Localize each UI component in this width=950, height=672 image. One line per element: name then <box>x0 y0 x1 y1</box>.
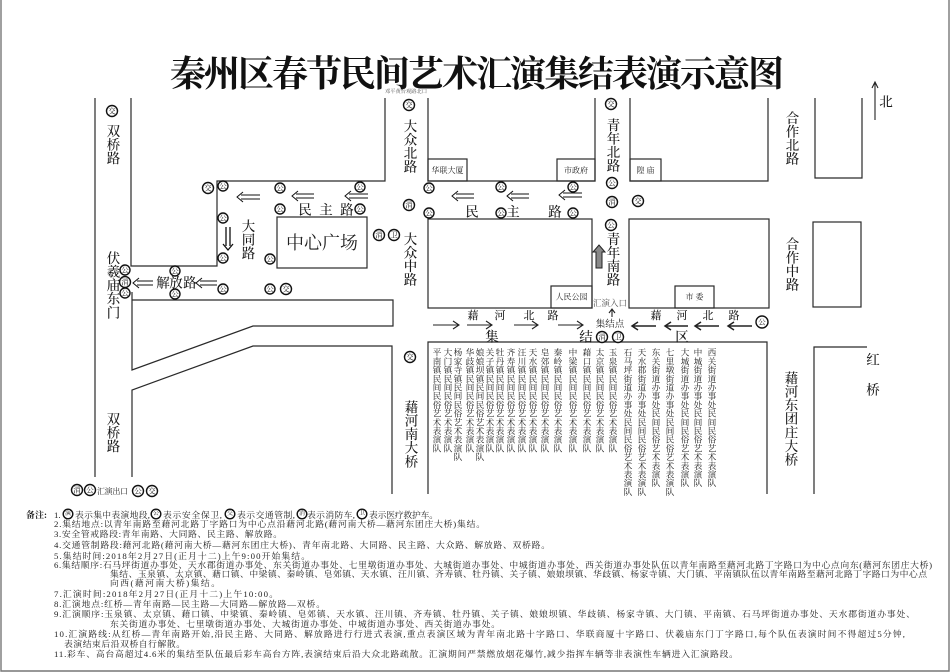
markers: west section: 公 <box>219 254 227 262</box>
panel: performance team columns: 大门镇民间民俗艺术表演队 <box>442 347 453 453</box>
road names: horizontal labels: 路 <box>183 276 197 290</box>
markers: east section: 卫 <box>614 332 622 342</box>
road names: horizontal labels: 主 <box>319 202 333 218</box>
panel: performance team columns: 关子镇民间民俗艺术表演队 <box>484 347 495 453</box>
exit label: 汇演出口: 公 <box>86 486 94 494</box>
note 1: legend: 交 <box>227 509 233 517</box>
road names: vertical labels: 青年南路 <box>604 231 620 287</box>
road names: vertical labels: 大同路 <box>240 218 255 260</box>
road names: horizontal labels: 路 <box>548 308 558 322</box>
markers: central section <box>374 100 578 362</box>
landmark: 中心广场 <box>277 217 367 268</box>
exit label: 汇演出口: 汇演出口 <box>97 486 128 496</box>
double arrow: 大同路 south <box>223 227 233 250</box>
markers: central section: 交 <box>406 352 414 362</box>
markers: west section: 公 <box>356 182 364 192</box>
panel: performance team columns: 石马坪街道办事处民间民俗艺术表演队 <box>622 348 633 497</box>
exit label: 汇演出口: 公 <box>134 486 142 496</box>
road names: horizontal labels: 解 <box>156 276 170 290</box>
road names: vertical labels: 双桥路 <box>104 124 120 165</box>
markers: west section: 公 <box>121 266 129 274</box>
markers: west section: 公 <box>219 182 227 190</box>
notes block <box>26 509 932 659</box>
panel: performance team columns: 天水镇民间民俗艺术表演队 <box>527 348 538 453</box>
markers: west section: 公 <box>171 266 179 276</box>
landmark: 市政府 <box>557 159 595 181</box>
landmark: 中心广场: 中心广场 <box>286 233 358 253</box>
landmark: 华联大厦: 华联大厦 <box>432 165 464 175</box>
assembly area label: 集结区 <box>485 328 689 344</box>
panel: performance team columns: 中梁镇民间民俗艺术表演队 <box>567 347 578 453</box>
double arrow: 青年南路 north <box>593 245 605 268</box>
road names: horizontal labels: 民 <box>465 204 479 220</box>
note 1: legend: 1. <box>54 510 61 520</box>
markers: central section: 卫 <box>390 230 398 240</box>
road names: horizontal labels: 民 <box>298 202 312 218</box>
panel: performance team columns: 中城街道办事处民间民俗艺术表演队 <box>692 347 703 488</box>
markers: west section: 消 <box>121 276 129 286</box>
double arrows: 民主路 <box>237 190 582 202</box>
markers: east section: 交 <box>634 196 642 206</box>
panel: performance team columns: 藉口镇民间民俗艺术表演队 <box>581 347 592 453</box>
markers: west section: 公 <box>356 204 364 214</box>
markers: east section: 公 <box>608 178 616 188</box>
note 1: legend: 表示医疗救护车。 <box>369 509 438 520</box>
assembly area label: 集结区: 集 <box>485 328 499 344</box>
north arrow: 北 <box>879 94 893 110</box>
notes 2 to 11 <box>54 518 932 659</box>
markers: west section: 公 <box>121 288 129 298</box>
notes 2 to 11: 8.汇演地点:红桥—青年南路—民主路—大同路—解放路—双桥。 <box>54 598 325 609</box>
note 1: legend: 表示消防车, <box>307 509 355 520</box>
road names: horizontal labels: 河 <box>494 309 506 322</box>
markers: central section: 公 <box>569 182 577 192</box>
panel: performance team columns: 太京镇民间民俗艺术表演队 <box>594 347 605 453</box>
panel: performance team columns: 娘娘坝镇民间民俗艺术表演队 <box>474 347 485 462</box>
road names: horizontal labels: 放 <box>169 276 183 290</box>
note 1: legend: 表示集中表演地段, <box>75 509 150 520</box>
notes 2 to 11: 5.集结时间:2018年2月27日(正月十二)上午9:00开始集结。 <box>54 550 310 561</box>
markers: west section: 交 <box>204 182 212 192</box>
map: street blocks <box>95 98 867 494</box>
markers: central section: 公 <box>425 208 433 218</box>
markers: central section: 公 <box>497 182 505 192</box>
notes 2 to 11: 9.汇演顺序:玉泉镇、太京镇、藉口镇、中梁镇、秦岭镇、皂郊镇、天水镇、汪川镇、齐寿镇、牡丹镇、关子镇、娘娘坝镇、华歧镇、杨家寺镇、大门镇、平南镇、石马坪街道办事处、天水郡街道办事处、 <box>54 608 915 619</box>
markers: west section: 交 <box>108 106 116 116</box>
landmark: 市政府: 市政府 <box>564 165 588 175</box>
markers: central section: 公 <box>497 208 505 218</box>
road names: horizontal labels: 藉 <box>650 308 662 322</box>
markers: central section: 公 <box>569 208 577 218</box>
panel: performance team columns: 汪川镇民间民俗艺术表演队 <box>516 348 527 453</box>
markers: central section: 公 <box>425 184 433 192</box>
notes 2 to 11: 表演结束后沿双桥自行解散。 <box>64 638 185 649</box>
road names: horizontal labels: 藉 <box>468 308 478 322</box>
note 1: legend: 公 <box>153 510 159 517</box>
panel: performance team columns <box>431 347 717 497</box>
note 1: legend <box>54 509 438 520</box>
assembly area label: 集结区: 结 <box>579 328 593 344</box>
note 1: legend: 消 <box>299 509 305 517</box>
road names: horizontal labels: 北 <box>524 309 534 322</box>
notes 2 to 11: 集结、玉泉镇、太京镇、藉口镇、中梁镇、秦岭镇、皂郊镇、天水镇、汪川镇、齐寿镇、牡丹镇、关子镇、娘娘坝镇、华歧镇、杨家寺镇、大门镇、平南镇队伍以青年南路至藉河北路丁字路口为中心点 <box>110 568 927 579</box>
panel: performance team columns: 东关街道办事处民间民俗艺术表演队 <box>650 347 661 488</box>
road names: vertical labels: 藉河东团庄大桥 <box>782 370 798 467</box>
notes 2 to 11: 向西(藉河南大桥)集结。 <box>110 577 220 588</box>
markers: west section: 公 <box>171 290 179 298</box>
markers: east section: 公 <box>758 318 766 326</box>
label: top entrance: 邓平黄台观路北口 <box>385 87 427 95</box>
markers: west section: 交 <box>282 284 290 294</box>
markers: west section: 公 <box>276 204 284 214</box>
arrow: to entrance <box>609 309 615 317</box>
road names: vertical labels: 大众北路 <box>402 118 417 174</box>
label: 汇演入口: 汇演入口 <box>593 298 627 308</box>
title: 秦州区春节民间艺术汇演集结表演示意图 <box>170 53 784 94</box>
note 1: legend: 卫 <box>359 509 365 517</box>
panel: performance team columns: 齐寿镇民间民俗艺术表演队 <box>505 347 516 453</box>
road names: horizontal labels: 路 <box>728 308 740 322</box>
panel: performance team columns: 七里墩街道办事处民间民俗艺术表演队 <box>664 347 675 497</box>
exit label: 汇演出口: 消 <box>73 484 81 494</box>
markers: central section: 消 <box>375 230 383 240</box>
north arrow <box>872 82 893 120</box>
notes 2 to 11: 6.集结顺序:石马坪街道办事处、天水郡街道办事处、东关街道办事处、七里墩街道办事处、大城街道办事处、中城街道办事处、西关街道办事处队伍以青年南路至藉河北路丁字路口为中心点向东(藉河东团庄大桥) <box>54 559 932 570</box>
notes 2 to 11: 4.交通管制路段:藉河北路(藉河南大桥—藉河东团庄大桥)、青年南北路、大同路、民主路、大众路、解放路、双桥路。 <box>54 539 550 550</box>
landmark: 隍庙 <box>630 159 661 181</box>
markers: west section: 公 <box>266 284 274 294</box>
label: 集结点: 集结点 <box>596 318 625 330</box>
notes heading: 备注: <box>26 509 47 520</box>
panel: performance team columns: 玉泉镇民间民俗艺术表演队 <box>607 348 618 453</box>
panel: performance team columns: 秦岭镇民间民俗艺术表演队 <box>552 347 563 453</box>
road names: horizontal labels: 河 <box>676 309 688 322</box>
notes 2 to 11: 3.安全管戒路段:青年南路、大同路、民主路、解放路。 <box>54 528 282 539</box>
landmark: 人民公园: 人民公园 <box>556 292 588 302</box>
note 1: legend: 表示交通管制, <box>237 509 295 520</box>
road names: horizontal labels: 北 <box>702 309 714 322</box>
road names: vertical labels: 大众中路 <box>402 231 417 287</box>
landmark: 隍庙: 隍 庙 <box>636 165 654 175</box>
markers: east section: 消 <box>598 332 606 342</box>
landmark: 市委 <box>675 286 714 308</box>
arrows: 藉河北路 westbound <box>632 322 752 330</box>
road names: horizontal labels: 路 <box>340 202 354 218</box>
note 1: legend: 演 <box>65 509 72 517</box>
notes 2 to 11: 2.集结地点:以青年南路至藉河北路丁字路口为中心点沿藉河北路(藉河南大桥—藉河东团庄大桥)集结。 <box>54 518 485 529</box>
markers: west section: 公 <box>266 254 274 264</box>
markers: east section: 消 <box>608 196 616 206</box>
panel: performance team columns: 皂郊镇民间民俗艺术表演队 <box>539 347 550 453</box>
notes 2 to 11: 11.彩车、高台高超过4.6米的集结至队伍最后彩车高台方阵,表演结束后沿大众北路疏散。汇演期间严禁燃放烟花爆竹,减少指挥车辆等非表演性车辆进入汇演路段。 <box>54 648 738 659</box>
landmark: 市委: 市 委 <box>686 292 704 302</box>
panel: performance team columns: 西关街道办事处民间民俗艺术表演队 <box>706 348 717 488</box>
label: 红桥 <box>866 352 880 398</box>
panel: performance team columns: 大城街道办事处民间民俗艺术表演队 <box>679 347 690 488</box>
road names: vertical labels: 青年北路 <box>604 117 620 173</box>
road names: vertical labels: 合作北路 <box>784 111 799 166</box>
road names: horizontal labels: 主 <box>506 204 520 220</box>
exit label: 汇演出口: 交 <box>148 486 156 496</box>
road names: horizontal labels <box>156 202 740 322</box>
road names: vertical labels <box>104 111 799 469</box>
exit label: 汇演出口 <box>72 484 158 496</box>
panel: performance team columns: 天水郡街道办事处民间民俗艺术表演队 <box>636 348 647 497</box>
markers: west section: 公 <box>219 284 227 294</box>
road names: vertical labels: 伏羲庙东门 <box>104 251 120 319</box>
landmark: 人民公园 <box>551 286 592 308</box>
panel: performance team columns: 平南镇民间民俗艺术表演队 <box>431 348 442 453</box>
road names: horizontal labels: 路 <box>548 204 562 220</box>
landmark: 华联大厦 <box>428 159 467 181</box>
markers: central section: 交 <box>405 100 413 110</box>
markers: east section: 公 <box>607 220 615 230</box>
road names: vertical labels: 双桥路 <box>104 412 120 453</box>
double arrows: 解放路 west <box>133 278 217 288</box>
note 1: legend: 表示安全保卫, <box>163 509 222 520</box>
panel: performance team columns: 牡丹镇民间民俗艺术表演队 <box>494 347 505 453</box>
markers: east section <box>596 98 768 342</box>
label: 红桥: 桥 <box>866 382 880 398</box>
arrows: 藉河北路 eastbound <box>433 321 583 329</box>
notes 2 to 11: 10.汇演路线:从红桥—青年南路开始,沿民主路、大同路、解放路进行行进式表演,重点表演区域为青年南北路十字路口、华联商厦十字路口、伏羲庙东门丁字路口,每个队伍表演时间不得超过5分钟, <box>54 628 905 639</box>
markers: west section: 公 <box>276 184 284 192</box>
notes 2 to 11: 7.汇演时间:2018年2月27日(正月十二)上午10:00。 <box>54 588 278 599</box>
markers: west section: 公 <box>219 214 227 222</box>
label: 红桥: 红 <box>866 352 880 368</box>
road names: vertical labels: 合作中路 <box>784 237 799 292</box>
road names: vertical labels: 藉河南大桥 <box>402 399 418 469</box>
panel: performance team columns: 杨家寺镇民间民俗艺术表演队 <box>452 347 463 462</box>
markers: east section: 交 <box>607 98 615 108</box>
notes 2 to 11: 东关街道办事处、七里墩街道办事处、大城街道办事处、中城街道办事处、西关街道办事处。 <box>110 618 500 629</box>
assembly area label: 集结区: 区 <box>675 330 689 344</box>
panel: performance team columns: 华歧镇民间民俗艺术表演队 <box>464 347 475 453</box>
markers: central section: 消 <box>405 200 413 210</box>
markers: west section <box>106 106 365 299</box>
